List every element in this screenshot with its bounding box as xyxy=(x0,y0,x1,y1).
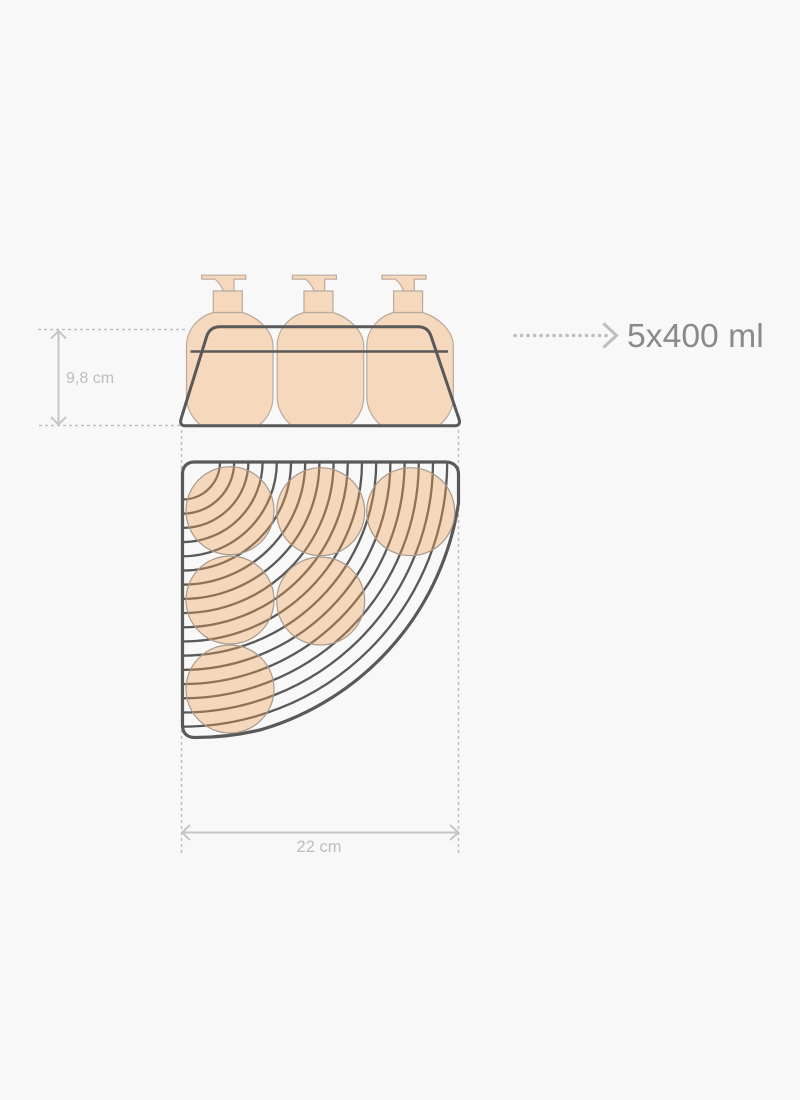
capacity label: 5x400 ml xyxy=(627,317,764,355)
bottle right xyxy=(367,275,453,426)
bottle circles xyxy=(186,467,455,733)
side view: bottles in basket xyxy=(181,275,460,426)
capacity callout: 5x400 ml xyxy=(515,317,764,355)
width dimension: 22 cm: 22 cm xyxy=(297,838,341,856)
basket outer frame xyxy=(182,462,458,738)
width dimension: 22 cm xyxy=(182,430,458,856)
top view: basket with bottles xyxy=(182,462,458,738)
height dimension: 9,8 cm xyxy=(38,330,186,426)
basket frame side view xyxy=(181,327,460,426)
dotted arrow xyxy=(515,324,616,348)
bottle left xyxy=(186,275,273,426)
bottle center xyxy=(277,275,364,426)
height dimension: 9,8 cm: 9,8 cm xyxy=(66,370,114,387)
wire arcs xyxy=(182,462,447,727)
